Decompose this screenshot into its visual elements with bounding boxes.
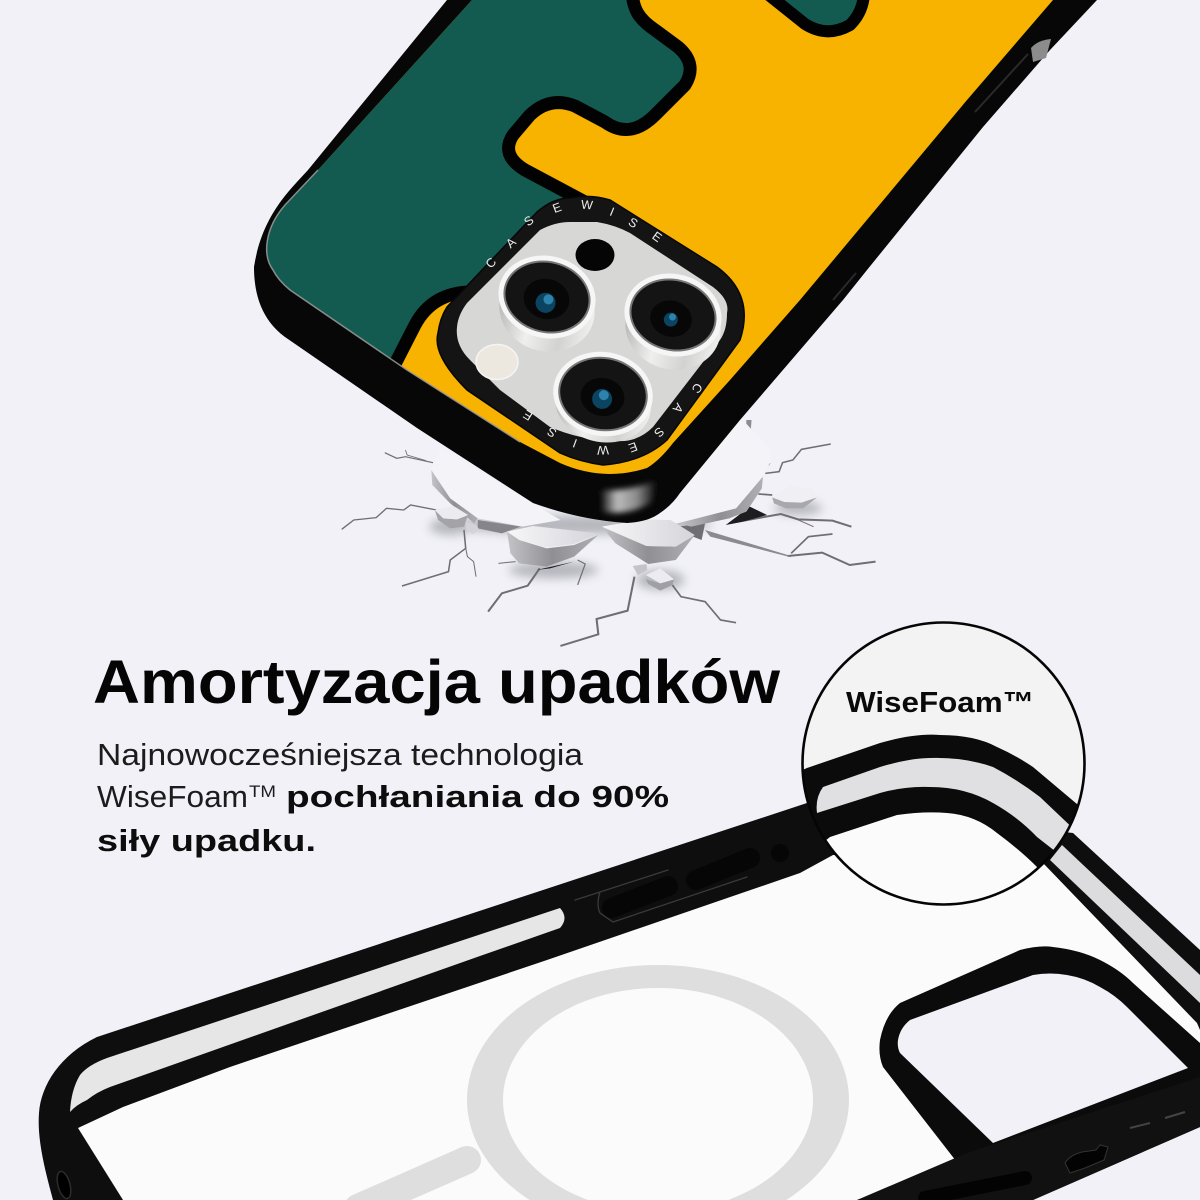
silver plate bbox=[457, 222, 727, 441]
case frame bbox=[39, 803, 1200, 1200]
broken chunk right bbox=[602, 519, 695, 564]
ring lettering top: S bbox=[626, 215, 640, 231]
left foam slot bbox=[70, 908, 564, 1112]
raised right slab bbox=[643, 420, 770, 527]
lens right bbox=[612, 263, 732, 380]
broken chunk left bbox=[507, 526, 598, 567]
side buttons bbox=[575, 844, 789, 922]
ring lettering bottom: A bbox=[670, 400, 686, 416]
wisefoam magnifier bbox=[801, 621, 1086, 906]
phone with puzzle case bbox=[200, 0, 1097, 523]
ring lettering bottom: C bbox=[689, 380, 705, 396]
right foam slot bbox=[1050, 845, 1200, 1003]
small stones bbox=[435, 485, 817, 591]
clear case bbox=[39, 803, 1200, 1200]
magsafe pill bbox=[358, 1160, 467, 1200]
floor cracks illustration bbox=[342, 420, 876, 646]
ring lettering top bbox=[483, 198, 664, 271]
side button glint bbox=[1031, 39, 1051, 62]
magsafe ring bbox=[467, 965, 849, 1200]
ring lettering bottom bbox=[521, 380, 705, 457]
ring lettering bottom: E bbox=[627, 439, 639, 455]
magnifier disc bbox=[802, 622, 1084, 904]
back plate bbox=[266, 0, 1053, 474]
bottom side band bbox=[857, 1077, 1200, 1200]
teal tab top bbox=[760, 0, 864, 31]
ring lettering bottom: S bbox=[651, 424, 667, 440]
clear window bbox=[78, 855, 1200, 1200]
camera module bbox=[437, 196, 744, 465]
lens bottom bbox=[545, 344, 660, 450]
flash bbox=[476, 344, 518, 380]
ring lettering top: E bbox=[650, 229, 664, 245]
description text: pochłaniania do 90% bbox=[286, 779, 669, 814]
bottom button bbox=[925, 1178, 1025, 1198]
ring lettering top: A bbox=[503, 235, 519, 251]
description text: Najnowocześniejsza technologia bbox=[97, 737, 584, 772]
module black ring bbox=[437, 196, 744, 465]
camera cutout bbox=[879, 946, 1200, 1170]
ring lettering top: S bbox=[521, 213, 537, 229]
lidar hole bbox=[576, 239, 614, 271]
case bumper bbox=[254, 0, 1097, 523]
bumper gloss highlight bbox=[600, 480, 657, 513]
raised left slab bbox=[431, 448, 560, 527]
magnifier label: WiseFoam™ bbox=[846, 687, 1034, 719]
heading: Amortyzacja upadków bbox=[93, 648, 781, 716]
bottom band stripes bbox=[1130, 1112, 1185, 1128]
soft shadow on floor bbox=[430, 502, 822, 590]
ring lettering top: C bbox=[483, 255, 499, 271]
ring lettering bottom: I bbox=[571, 436, 579, 450]
description text: TM bbox=[249, 782, 276, 801]
port bbox=[1065, 1145, 1108, 1173]
crack wedges bbox=[478, 420, 791, 570]
left edge port bbox=[55, 1170, 73, 1200]
lens top left bbox=[486, 245, 606, 362]
teal puzzle piece bbox=[266, 0, 697, 366]
ring lettering bottom: W bbox=[597, 443, 609, 457]
magnified frame bbox=[804, 734, 1078, 868]
description text bbox=[97, 737, 669, 858]
plate rim highlight bbox=[267, 170, 520, 442]
crack lines bbox=[342, 444, 876, 646]
side button line bbox=[833, 54, 1028, 300]
description text: WiseFoam bbox=[97, 779, 248, 814]
ring lettering top: W bbox=[581, 198, 594, 213]
ring lettering top: I bbox=[608, 205, 616, 219]
ring lettering top: E bbox=[551, 200, 563, 216]
ring lettering bottom: S bbox=[545, 424, 559, 440]
ring lettering bottom: E bbox=[521, 407, 535, 423]
magnifier outline bbox=[802, 622, 1084, 904]
camera opening bbox=[898, 974, 1188, 1143]
description text: siły upadku. bbox=[97, 823, 316, 858]
